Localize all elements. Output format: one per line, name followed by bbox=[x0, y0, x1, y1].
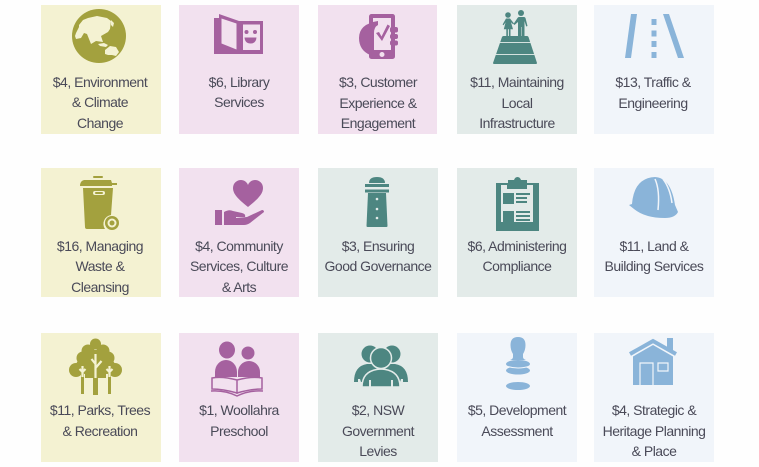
label: Infrastructure bbox=[479, 115, 555, 131]
panel: NSW Government Levies bbox=[318, 333, 438, 462]
label: Local bbox=[502, 95, 533, 111]
label: Compliance bbox=[483, 258, 552, 274]
label: $3, Customer bbox=[339, 74, 418, 90]
panel: Managing Waste & Cleansing bbox=[41, 168, 161, 297]
label: & Recreation bbox=[63, 423, 137, 439]
icon: lighthouse bbox=[365, 177, 389, 227]
label: $4, Environment bbox=[53, 74, 148, 90]
panel: Land & Building Services bbox=[594, 168, 714, 297]
label: Building Services bbox=[605, 258, 704, 274]
panel: Administering Compliance bbox=[457, 168, 577, 297]
label: & Arts bbox=[222, 279, 257, 295]
label: Waste & bbox=[76, 258, 126, 274]
icon: road bbox=[625, 14, 684, 58]
icon: wheelie bin bbox=[80, 176, 119, 230]
label: Services, Culture bbox=[190, 258, 289, 274]
panel: Library Services bbox=[179, 5, 299, 134]
icon: clipboard bbox=[496, 177, 539, 231]
panel: Strategic & Heritage Planning & Place bbox=[594, 333, 714, 462]
label: Government bbox=[342, 423, 415, 439]
icon: two people on a stepped plinth bbox=[493, 10, 537, 64]
icon: three people bbox=[354, 346, 408, 387]
panel: Community Services, Culture & Arts bbox=[179, 168, 299, 297]
panel: Ensuring Good Governance bbox=[318, 168, 438, 297]
label: $4, Community bbox=[195, 238, 283, 254]
label: Engagement bbox=[341, 115, 416, 131]
label: & Place bbox=[632, 443, 677, 459]
label: $13, Traffic & bbox=[615, 74, 692, 90]
panel: Traffic & Engineering bbox=[594, 5, 714, 134]
icon: house bbox=[630, 338, 676, 385]
panel: Development Assessment bbox=[457, 333, 577, 462]
label: Levies bbox=[359, 443, 397, 459]
icon: hard hat bbox=[629, 177, 678, 218]
panel: Parks, Trees & Recreation bbox=[41, 333, 161, 462]
icon: open book with smiley bbox=[214, 14, 263, 54]
label: Preschool bbox=[210, 423, 268, 439]
label: $1, Woollahra bbox=[199, 402, 280, 418]
label: $3, Ensuring bbox=[342, 238, 414, 254]
panel: Woollahra Preschool bbox=[179, 333, 299, 462]
label: $4, Strategic & bbox=[612, 402, 697, 418]
label: Experience & bbox=[339, 95, 418, 111]
label: $6, Library bbox=[209, 74, 270, 90]
label: $6, Administering bbox=[468, 238, 566, 254]
label: $11, Maintaining bbox=[470, 74, 564, 90]
label: Heritage Planning bbox=[603, 423, 705, 439]
icon: rubber stamp bbox=[506, 337, 530, 390]
label: $2, NSW bbox=[352, 402, 406, 418]
icon: two readers with book bbox=[211, 342, 263, 396]
label: Change bbox=[77, 115, 124, 131]
icon: globe bbox=[72, 9, 126, 63]
label: & Climate bbox=[72, 94, 129, 110]
label: $11, Parks, Trees bbox=[50, 402, 151, 418]
panel: Environment & Climate Change bbox=[41, 5, 161, 134]
panel: Customer Experience & Engagement bbox=[318, 5, 437, 134]
icon: three trees bbox=[69, 338, 122, 395]
label: Assessment bbox=[481, 423, 553, 439]
label: $5, Development bbox=[468, 402, 567, 418]
icon: hand holding phone bbox=[359, 14, 398, 59]
panel: Maintaining Local Infrastructure bbox=[457, 5, 577, 134]
label: Cleansing bbox=[71, 279, 129, 295]
label: Good Governance bbox=[325, 258, 432, 274]
label: Engineering bbox=[618, 95, 688, 111]
label: $16, Managing bbox=[57, 238, 143, 254]
icon: hand holding a heart bbox=[215, 180, 264, 225]
label: $11, Land & bbox=[620, 238, 690, 254]
label: Services bbox=[214, 94, 264, 110]
